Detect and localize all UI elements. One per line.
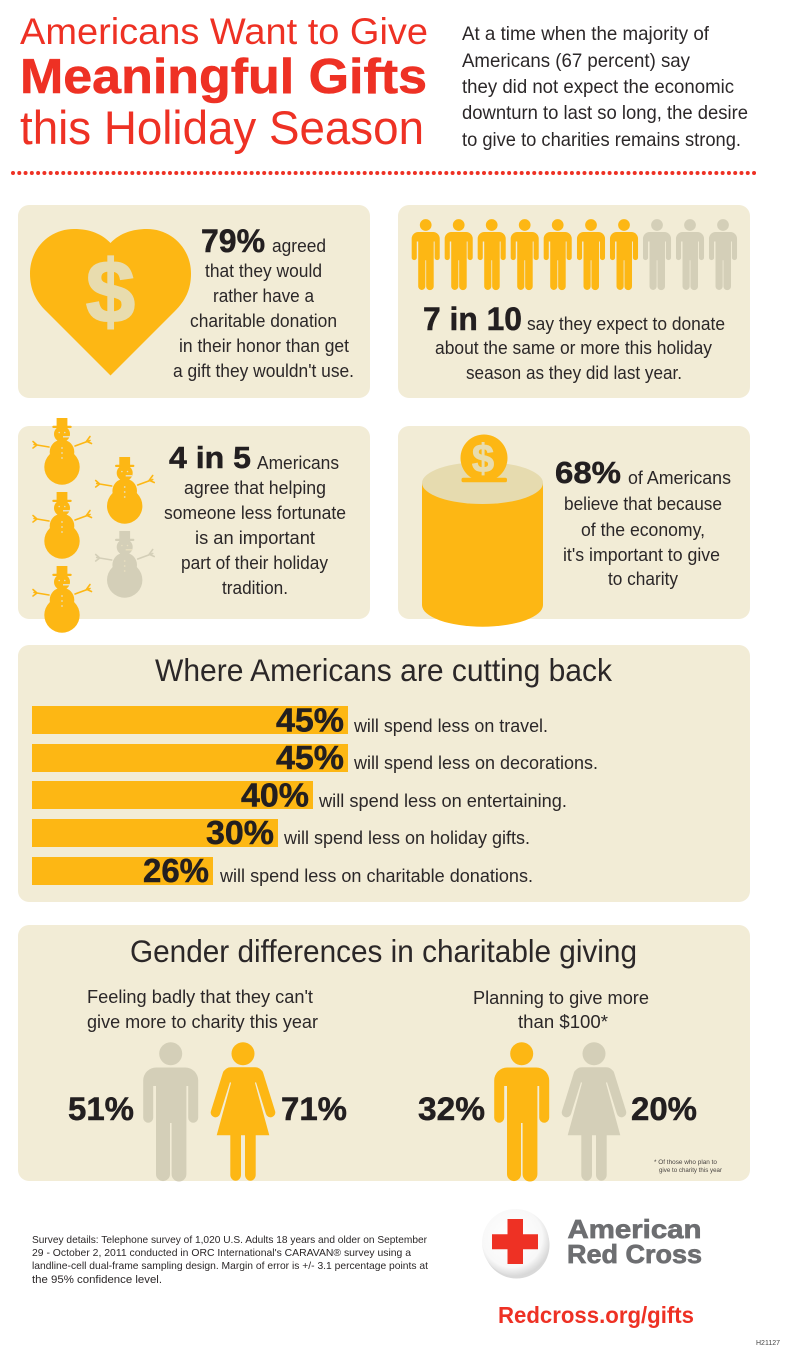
icon: five snowmen bbox=[33, 418, 154, 633]
text: 7 in 10: about the same or more this holiday bbox=[435, 337, 713, 358]
footnote: give to charity this year bbox=[659, 1167, 723, 1174]
intro text: Americans (67 percent) say bbox=[462, 50, 690, 72]
wordmark: Red Cross bbox=[567, 1239, 702, 1269]
bar: holiday gifts 30 percent: 30% bbox=[206, 814, 274, 851]
bar: decorations 45 percent: will spend less on decorations. bbox=[353, 753, 598, 773]
icon: row of ten people bbox=[412, 219, 737, 290]
icon: donation can with coin bbox=[422, 434, 543, 627]
subheading: planning to give: Planning to give more bbox=[473, 987, 649, 1008]
text: 4 in 5: Americans bbox=[257, 452, 339, 473]
icon: woman grey bbox=[566, 1042, 622, 1181]
subheading: feeling badly: Feeling badly that they can't bbox=[87, 986, 313, 1007]
survey details: landline-cell dual-frame sampling design. Margin of error is +/- 3.1 percentage points at bbox=[32, 1260, 428, 1272]
panel: 68 percent bbox=[398, 426, 750, 627]
footnote bbox=[654, 1159, 723, 1174]
title: this Holiday Season bbox=[20, 101, 424, 154]
bar: travel 45 percent bbox=[32, 702, 548, 738]
bar: charitable donations 26 percent: 26% bbox=[143, 852, 209, 889]
text: 7 in 10: 7 in 10 bbox=[423, 301, 522, 337]
text: 68 percent: of Americans bbox=[628, 467, 731, 488]
bar: entertaining 40 percent: 40% bbox=[241, 776, 309, 814]
text: 68 percent: believe that because bbox=[564, 493, 722, 514]
title: Meaningful Gifts bbox=[20, 50, 427, 104]
icon: red cross button bbox=[482, 1209, 550, 1278]
panel: where Americans are cutting back bbox=[18, 645, 750, 902]
icon: heart with dollar sign: $ bbox=[86, 242, 135, 341]
text: 79 percent: rather have a bbox=[213, 285, 315, 306]
intro text: downturn to last so long, the desire bbox=[462, 102, 748, 124]
title: Americans Want to Give bbox=[20, 11, 428, 52]
text: 79 percent: charitable donation bbox=[190, 310, 337, 331]
bar: holiday gifts 30 percent: will spend less on holiday gifts. bbox=[283, 828, 530, 848]
title bbox=[20, 11, 428, 154]
icon: heart with dollar sign bbox=[30, 229, 191, 376]
bar: travel 45 percent: 45% bbox=[276, 702, 344, 738]
subheading: feeling badly bbox=[87, 986, 318, 1032]
survey details: 29 - October 2, 2011 conducted in ORC International's CARAVAN® survey using a bbox=[32, 1247, 411, 1259]
intro text: to give to charities remains strong. bbox=[462, 129, 741, 151]
logo: American Red Cross bbox=[482, 1209, 702, 1278]
icon: woman yellow bbox=[216, 1042, 270, 1181]
stat: men 51 percent: 51% bbox=[68, 1091, 134, 1127]
panel: 79 percent heart bbox=[18, 205, 370, 398]
bar: charitable donations 26 percent: will spend less on charitable donations. bbox=[219, 866, 533, 886]
survey details: Survey details: Telephone survey of 1,020 U.S. Adults 18 years and older on September bbox=[32, 1234, 427, 1246]
text: 4 in 5: part of their holiday bbox=[181, 552, 329, 573]
bar: decorations 45 percent bbox=[32, 739, 598, 776]
heading: cutting back: Where Americans are cutting back bbox=[155, 652, 612, 688]
subheading: planning to give bbox=[473, 987, 649, 1032]
text: 68 percent: 68% bbox=[555, 455, 621, 490]
text: 7 in 10: say they expect to donate bbox=[527, 313, 725, 334]
text: 4 in 5: agree that helping bbox=[184, 477, 326, 498]
reference code: H21127 bbox=[756, 1338, 780, 1347]
text: 4 in 5: someone less fortunate bbox=[164, 502, 346, 523]
stat: men 32 percent: 32% bbox=[418, 1091, 485, 1127]
bar: decorations 45 percent: 45% bbox=[276, 739, 344, 776]
heading: gender differences: Gender differences in charitable giving bbox=[130, 933, 637, 969]
survey details bbox=[32, 1234, 428, 1286]
subheading: feeling badly: give more to charity this year bbox=[87, 1011, 318, 1032]
text: 4 in 5: 4 in 5 bbox=[169, 440, 251, 475]
bar: holiday gifts 30 percent bbox=[32, 814, 530, 851]
wordmark: American bbox=[568, 1214, 702, 1244]
bar: travel 45 percent: will spend less on travel. bbox=[353, 716, 548, 736]
text: 68 percent: of the economy, bbox=[581, 519, 705, 540]
text: 79 percent: a gift they wouldn't use. bbox=[173, 360, 354, 381]
text: 79 percent: 79% bbox=[201, 223, 265, 259]
panel: 4 in 5 bbox=[18, 418, 370, 633]
bar: entertaining 40 percent bbox=[32, 776, 567, 814]
text: 4 in 5 bbox=[164, 440, 346, 598]
text: 4 in 5: tradition. bbox=[222, 577, 288, 598]
stat: women 71 percent: 71% bbox=[281, 1091, 347, 1127]
text: 4 in 5: is an important bbox=[195, 527, 315, 548]
stat: women 20 percent: 20% bbox=[631, 1091, 697, 1127]
text: 79 percent bbox=[173, 223, 354, 381]
survey details: the 95% confidence level. bbox=[32, 1274, 162, 1286]
text: 68 percent bbox=[555, 455, 731, 589]
panel: gender differences bbox=[18, 925, 750, 1182]
intro text: At a time when the majority of bbox=[462, 23, 710, 45]
intro text bbox=[462, 23, 748, 151]
text: 68 percent: to charity bbox=[608, 568, 679, 589]
bar: charitable donations 26 percent bbox=[32, 852, 533, 889]
bar: entertaining 40 percent: will spend less on entertaining. bbox=[318, 791, 567, 811]
text: 79 percent: that they would bbox=[205, 260, 322, 281]
panel: 7 in 10 bbox=[398, 205, 750, 398]
wordmark bbox=[567, 1214, 702, 1269]
text: 7 in 10: season as they did last year. bbox=[466, 362, 682, 383]
text: 68 percent: it's important to give bbox=[563, 544, 720, 565]
website link: Redcross.org/gifts bbox=[498, 1302, 694, 1328]
footnote: * Of those who plan to bbox=[654, 1159, 717, 1166]
icon: donation can with coin: $ bbox=[472, 437, 494, 481]
text: 79 percent: in their honor than get bbox=[179, 335, 349, 356]
text: 7 in 10 bbox=[423, 301, 725, 383]
icon: man grey bbox=[143, 1042, 198, 1182]
intro text: they did not expect the economic bbox=[462, 76, 734, 98]
text: 79 percent: agreed bbox=[272, 235, 326, 256]
icon: man yellow bbox=[494, 1042, 549, 1182]
subheading: planning to give: than $100* bbox=[518, 1011, 608, 1032]
